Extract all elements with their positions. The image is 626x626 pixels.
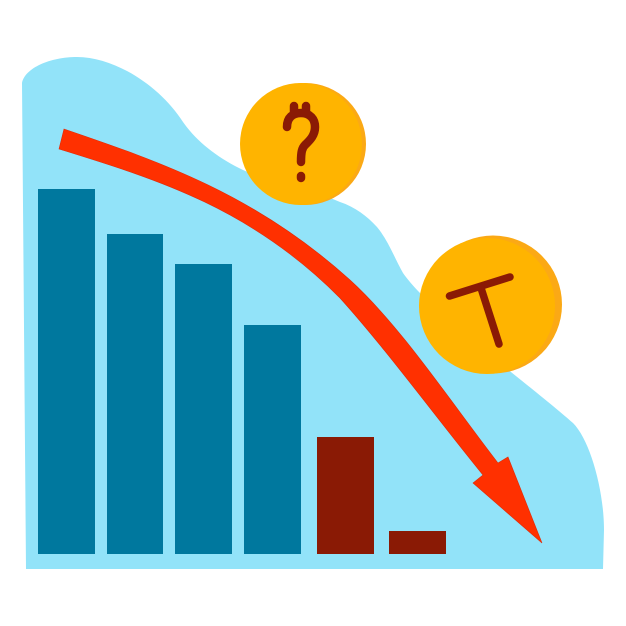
coin face <box>419 238 555 374</box>
bar chart <box>38 189 446 554</box>
coin face <box>240 83 362 205</box>
coin rim <box>244 83 366 205</box>
bar 1 <box>38 189 95 554</box>
bar 6 <box>389 531 446 554</box>
bar 3 <box>175 264 232 554</box>
background blob <box>22 57 604 569</box>
currency symbol <box>450 277 510 344</box>
falling red arrow <box>59 129 542 543</box>
currency symbol <box>287 106 315 178</box>
bar 2 <box>107 234 163 554</box>
bar 4 <box>244 325 301 554</box>
coin: question-style currency <box>240 83 366 205</box>
coin rim <box>424 236 562 374</box>
coin: tenge-style currency <box>419 236 562 374</box>
bar 5 <box>317 437 374 554</box>
